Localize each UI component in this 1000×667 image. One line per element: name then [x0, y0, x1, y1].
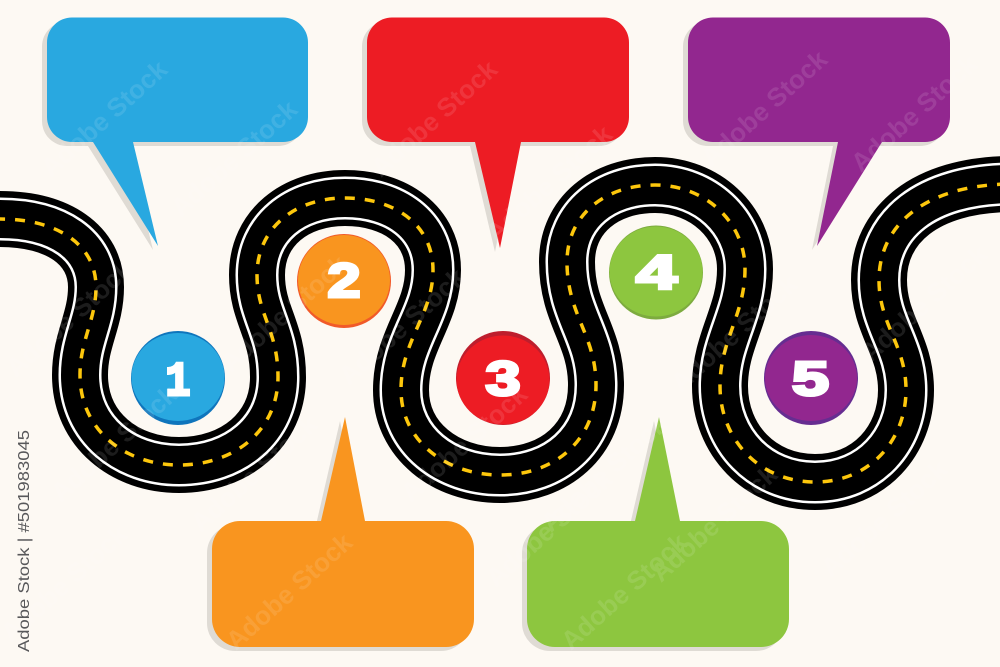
stock watermarks: Adobe Stock	[395, 379, 533, 508]
speech bubble 5: green	[522, 417, 789, 651]
stock watermarks: Adobe Stock	[480, 119, 618, 248]
marker 4	[609, 226, 703, 320]
stock watermarks: Adobe Stock	[220, 527, 358, 656]
stock watermarks: Adobe Stock	[0, 254, 138, 383]
marker 1	[131, 331, 225, 425]
winding road	[0, 184, 1000, 482]
vertical stock id: Adobe Stock | #501983045	[16, 430, 33, 652]
marker 1: 1	[166, 356, 190, 410]
stock watermarks: Adobe Stock	[215, 249, 353, 378]
stock watermarks: Adobe Stock	[45, 379, 183, 508]
stock watermarks: Adobe Stock	[535, 409, 673, 538]
speech bubble 3: purple	[683, 18, 950, 250]
stock watermarks: Adobe Stock	[645, 459, 783, 588]
stock watermarks: Adobe Stock	[855, 239, 993, 368]
stock watermarks: Adobe Stock	[185, 409, 323, 538]
marker 5: 5	[792, 353, 829, 406]
stock watermarks: Adobe Stock	[845, 49, 983, 178]
stock watermarks: Adobe Stock	[35, 54, 173, 183]
marker 5	[764, 331, 858, 425]
stock watermarks: Adobe Stock	[365, 54, 503, 183]
stock watermarks: Adobe Stock	[555, 527, 693, 656]
stock watermarks: Adobe Stock	[333, 262, 471, 391]
marker 2	[297, 234, 391, 328]
speech bubble 1: blue	[42, 18, 308, 250]
stock watermarks: Adobe Stock	[665, 269, 803, 398]
stock watermarks: Adobe Stock	[165, 94, 303, 223]
marker 3	[456, 331, 550, 425]
marker 3: 3	[486, 353, 520, 406]
speech bubble 2: red	[362, 18, 629, 252]
stock watermarks: Adobe Stock	[815, 454, 953, 583]
stock watermarks: Adobe Stock	[695, 44, 833, 173]
marker 2: 2	[328, 255, 360, 308]
speech bubble 4: orange	[207, 417, 474, 651]
marker 4: 4	[636, 247, 677, 300]
stock watermarks: Adobe Stock	[480, 464, 618, 593]
